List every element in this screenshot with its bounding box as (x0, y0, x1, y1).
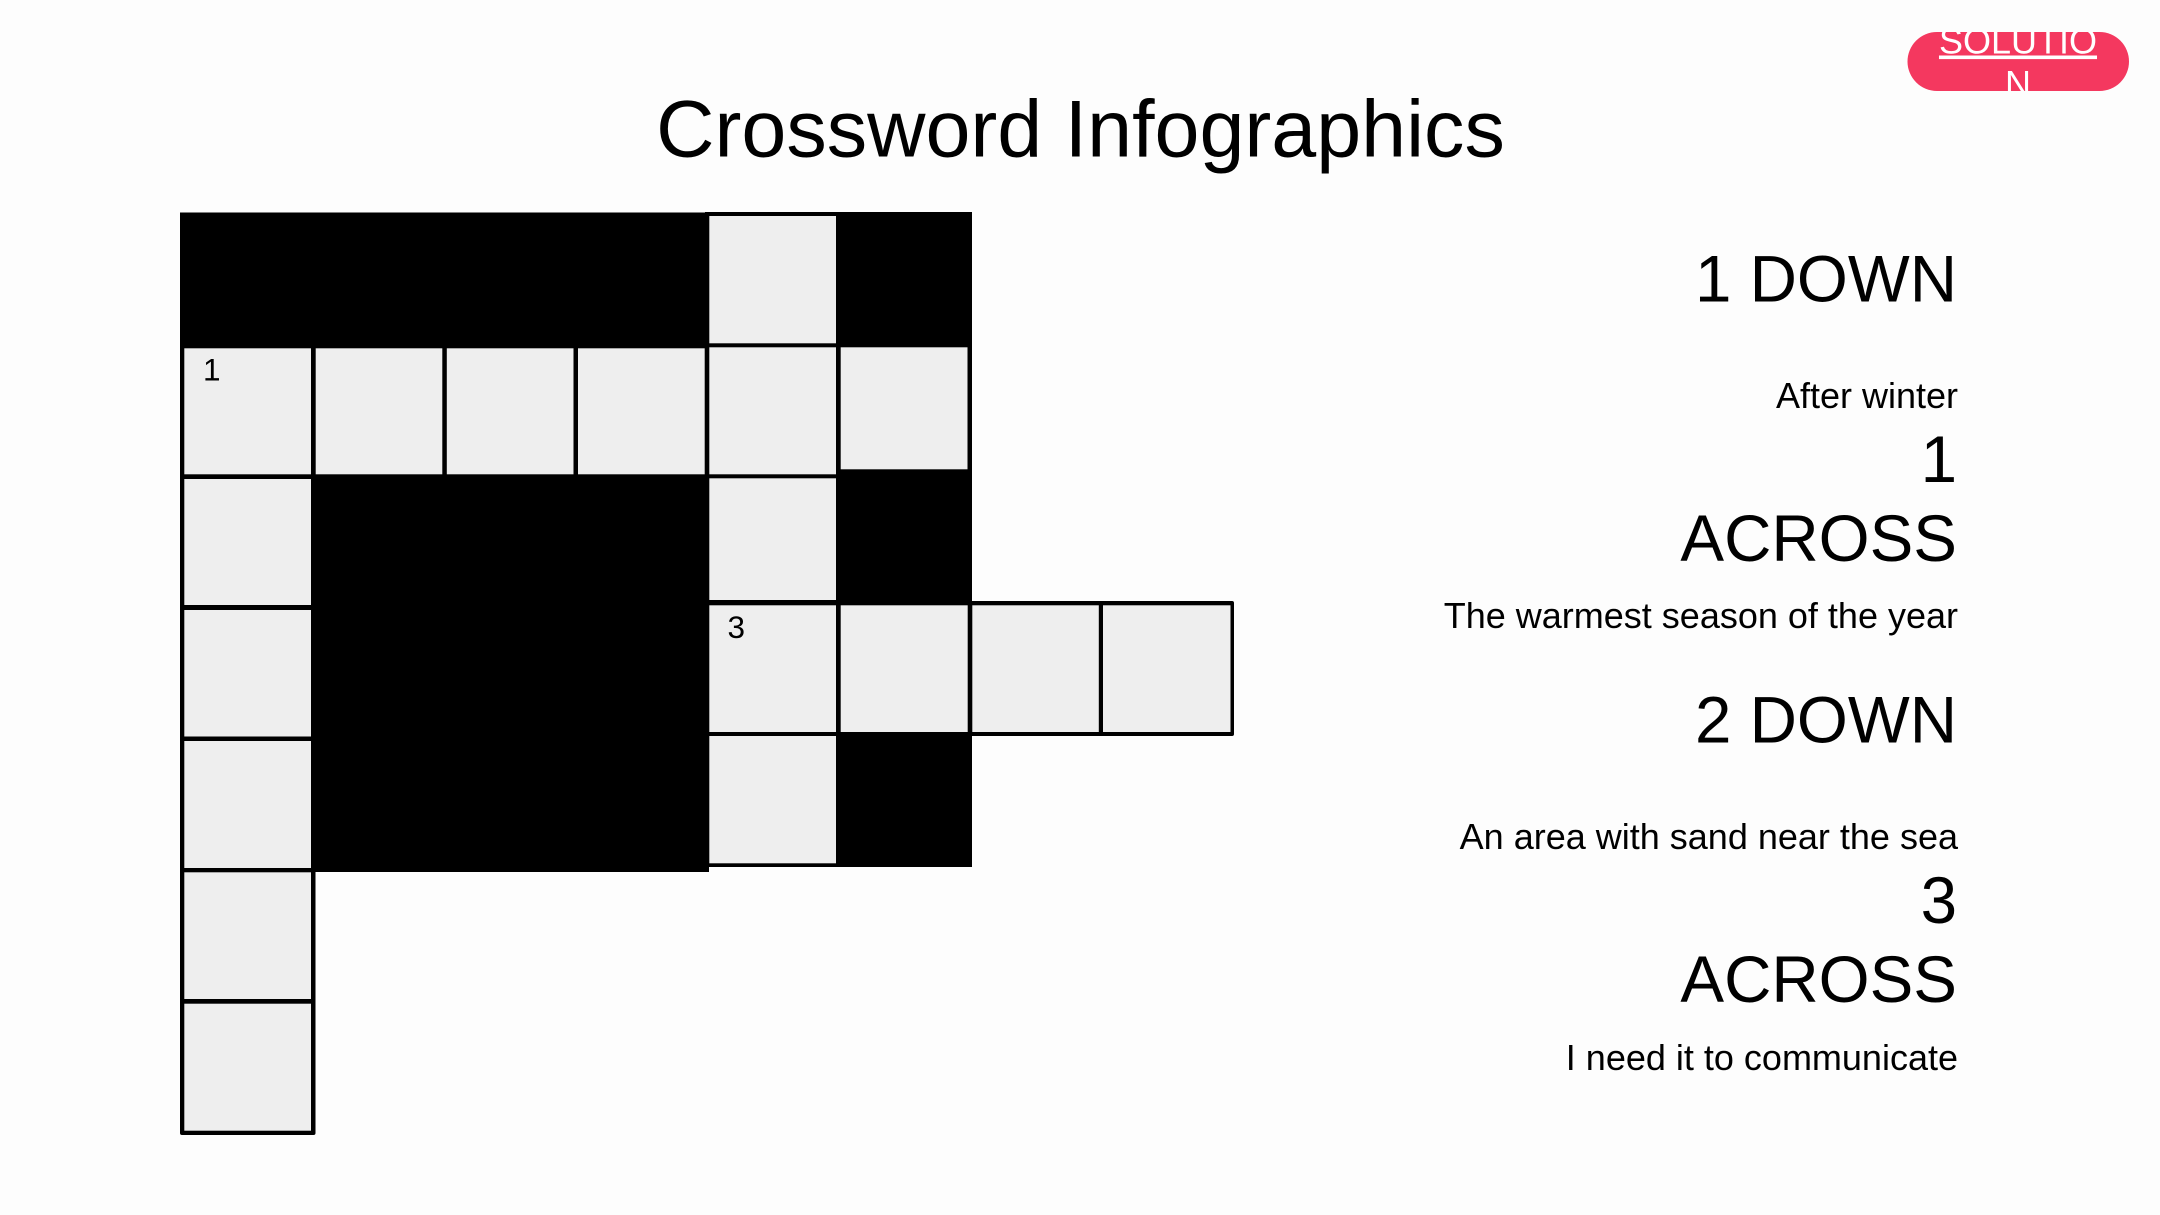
clue: 1 across: ACROSS (1680, 502, 1957, 575)
clue: 1 down: 1 DOWN (1695, 242, 1957, 316)
clue: 3 across: I need it to communicate (1566, 1037, 1958, 1078)
black blocks and grid lines (180, 212, 1234, 1135)
clue: 1 across: The warmest season of the year (1444, 595, 1958, 636)
clue: 2 down (1460, 684, 1959, 857)
column 1 down cells (184, 479, 311, 1131)
clue: 3 across (1566, 864, 1958, 1078)
clue: 1 down (1695, 242, 1958, 416)
column 2 down cells (709, 216, 836, 863)
crossword grid (180, 212, 1234, 1135)
clue: 1 across (1444, 423, 1958, 636)
clue: 3 across: 3 (1921, 864, 1957, 937)
cell number 3: 3 (728, 609, 745, 645)
clues (1444, 242, 1959, 1078)
clue: 2 down: 2 DOWN (1695, 684, 1957, 756)
solution button: SOLUTIO (1939, 20, 2097, 62)
solution button: N (2005, 63, 2031, 104)
clue: 3 across: ACROSS (1680, 943, 1957, 1016)
row 1 across cells (184, 347, 968, 474)
clue: 1 down: After winter (1776, 375, 1958, 416)
title: Crossword Infographics (656, 84, 1505, 174)
row 3 across cells (709, 605, 1230, 732)
clue: 1 across: 1 (1921, 423, 1957, 496)
cell number 1: 1 (203, 352, 221, 388)
solution button (1908, 32, 2129, 91)
clue: 2 down: An area with sand near the sea (1460, 816, 1959, 857)
